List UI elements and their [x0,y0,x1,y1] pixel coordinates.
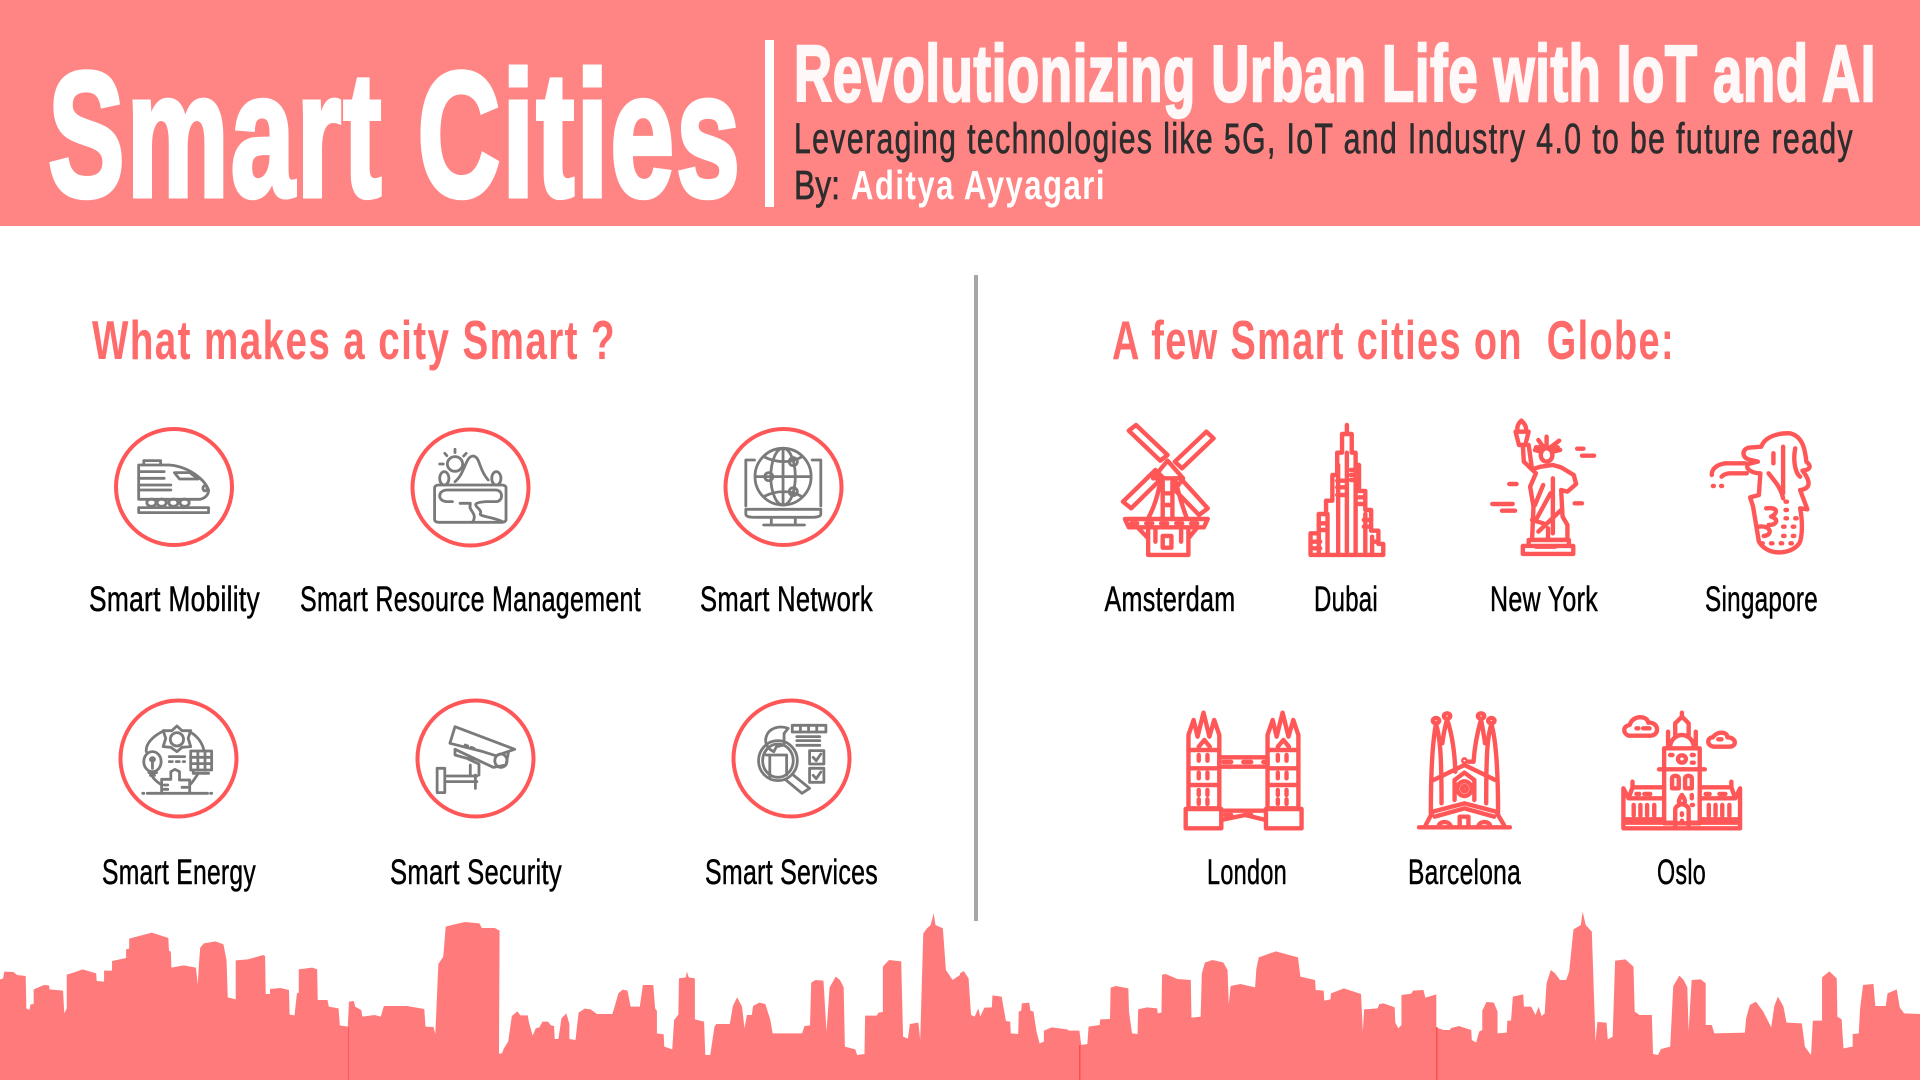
icon: sagrada familia [1419,713,1510,827]
icon: landscape [435,449,506,522]
icon: merlion [1712,433,1810,552]
label: Oslo [1657,853,1706,892]
feature: smart network [700,429,873,619]
icon: tower bridge [1186,713,1302,828]
centre divider [974,275,978,921]
label: Smart Resource Management [300,580,641,619]
feature: smart mobility [89,429,260,619]
title: Smart Cities [48,35,742,234]
label: Smart Energy [102,853,256,892]
icon: oslo city hall [1623,713,1740,828]
label: New York [1490,580,1598,619]
label: Amsterdam [1104,580,1236,619]
feature: smart services [705,700,878,892]
heading: what makes a city smart: What makes a city Smart ? [92,309,616,371]
skyline: right half [960,912,1920,1080]
icon: globe on monitor [746,448,821,525]
icon: burj khalifa [1311,425,1383,555]
city: dubai [1311,425,1383,619]
author: Aditya Ayyagari [851,162,1106,208]
icon: cctv camera [437,727,515,793]
city: oslo [1623,713,1740,892]
icon: energy city [143,726,212,793]
label: Smart Network [700,580,873,619]
feature: smart resource management [300,430,641,619]
icon: train [139,461,209,513]
label: Singapore [1705,580,1818,619]
city: barcelona [1408,713,1521,892]
icon: person under magnifier [759,725,826,793]
header divider bar [765,40,774,207]
city: london [1186,713,1302,892]
feature: smart energy [102,700,256,892]
icon: statue of liberty [1492,421,1594,554]
header banner [0,0,1920,226]
city: amsterdam [1104,425,1236,619]
author: By: [794,162,840,208]
label: Smart Security [390,853,562,892]
city: new york [1490,421,1598,619]
label: Smart Services [705,853,878,892]
label: London [1207,853,1287,892]
feature: smart security [390,700,562,892]
skyline: left half [0,914,960,1080]
author [794,162,1106,208]
city: singapore [1705,433,1818,619]
label: Dubai [1314,580,1378,619]
label: Barcelona [1408,853,1521,892]
heading: smart cities on globe: A few Smart cities on Globe: [1112,309,1675,371]
icon: windmill [1123,425,1214,555]
label: Smart Mobility [89,580,260,619]
